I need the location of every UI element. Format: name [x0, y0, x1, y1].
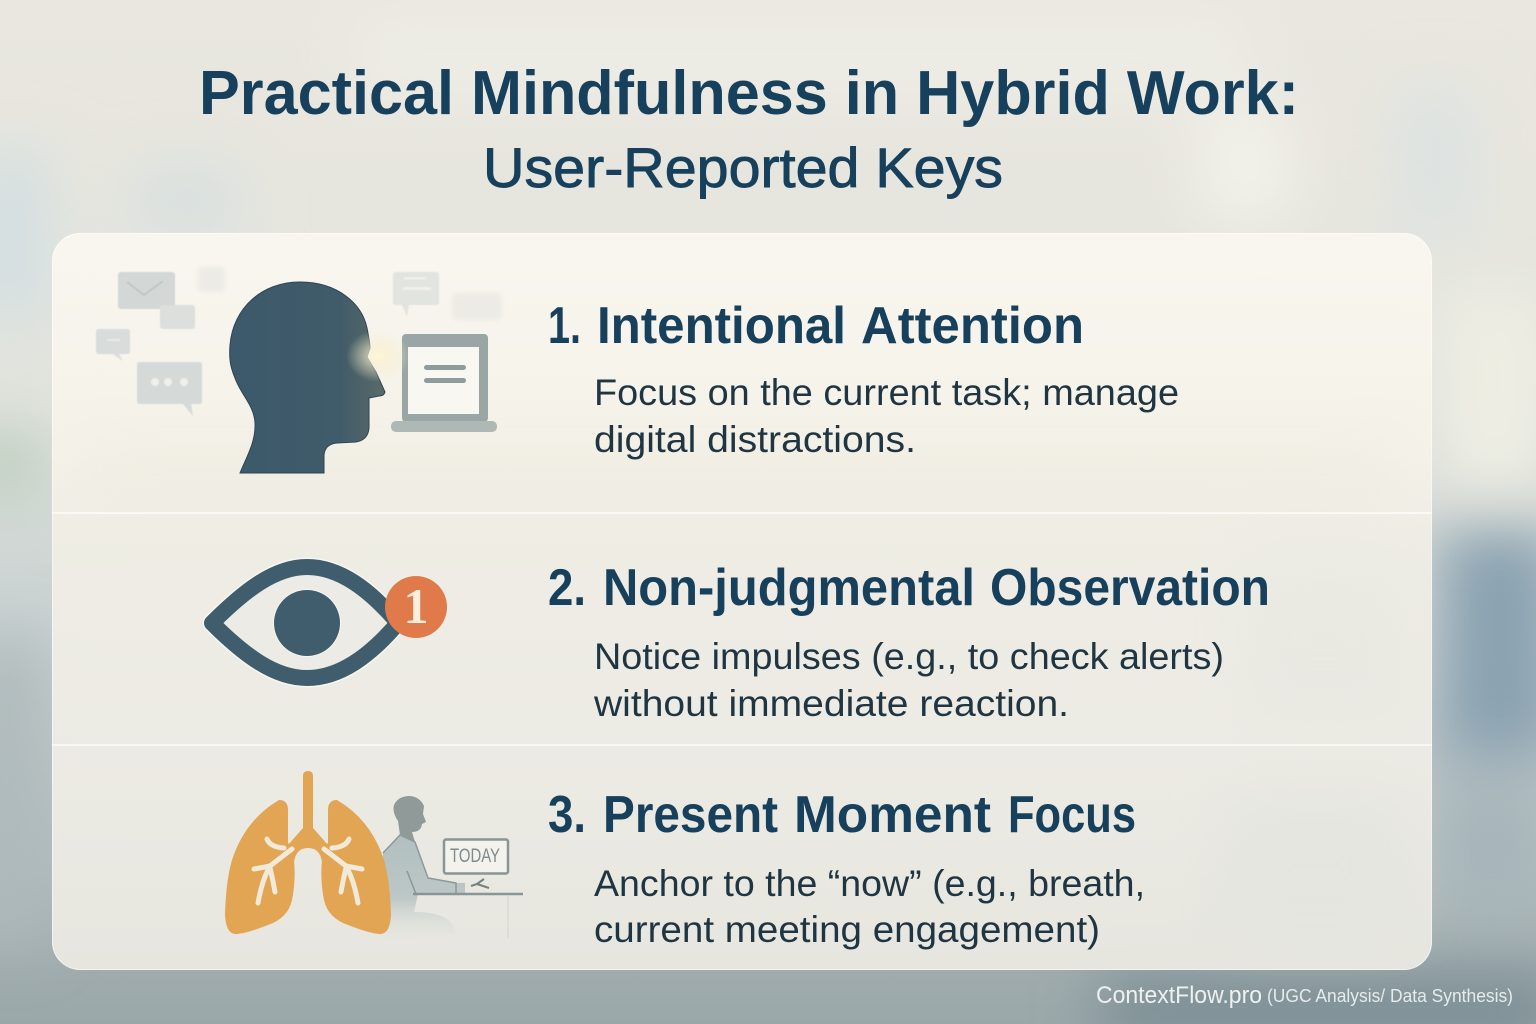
description 3: Anchor to the “now” (e.g., breath,	[594, 863, 1145, 904]
icon: person at desk with today screen: TODAY	[450, 846, 500, 867]
title: Practical Mindfulness in Hybrid Work:	[199, 59, 1299, 128]
description 1: digital distractions.	[594, 419, 916, 460]
source footer: ContextFlow.pro	[1096, 982, 1262, 1009]
heading 3: Moment	[794, 786, 991, 844]
heading 2: 2.	[548, 559, 586, 617]
heading 2: Observation	[990, 559, 1270, 617]
description 2: without immediate reaction.	[593, 683, 1069, 724]
description 3: current meeting engagement)	[594, 909, 1100, 950]
heading 2	[548, 559, 1270, 617]
heading 3: Focus	[1008, 786, 1136, 844]
heading 1: 1.	[548, 297, 581, 355]
translucent card panel	[52, 233, 1432, 970]
heading 1: Intentional	[597, 297, 846, 355]
description 3	[594, 863, 1145, 950]
icon: person at desk with today screen	[382, 796, 523, 940]
section 1: intentional attention	[96, 267, 1179, 473]
icon: eye with notification badge: 1	[404, 578, 428, 634]
source footer: (UGC Analysis/ Data Synthesis)	[1267, 986, 1513, 1006]
icon: laptop with document	[391, 334, 497, 432]
heading 1: Attention	[861, 297, 1084, 355]
description 1: Focus on the current task; manage	[594, 372, 1179, 413]
icon: orange lungs	[225, 771, 391, 934]
description 2	[593, 636, 1224, 724]
heading 3: Present	[603, 786, 778, 844]
description 1	[594, 372, 1179, 460]
heading 3: 3.	[548, 786, 586, 844]
section 3: present moment focus	[225, 771, 1145, 950]
title	[199, 59, 1299, 199]
icon: head silhouette	[230, 282, 410, 473]
heading 1	[548, 297, 1084, 355]
heading 2: Non-judgmental	[603, 559, 975, 617]
description 2: Notice impulses (e.g., to check alerts)	[594, 636, 1224, 677]
source footer	[1096, 982, 1513, 1009]
section 2: non-judgmental observation	[212, 559, 1270, 724]
title: User-Reported Keys	[483, 136, 1003, 199]
icon: eye with notification badge	[212, 567, 447, 678]
heading 3	[548, 786, 1136, 844]
icon: distraction message bubbles	[96, 267, 502, 416]
